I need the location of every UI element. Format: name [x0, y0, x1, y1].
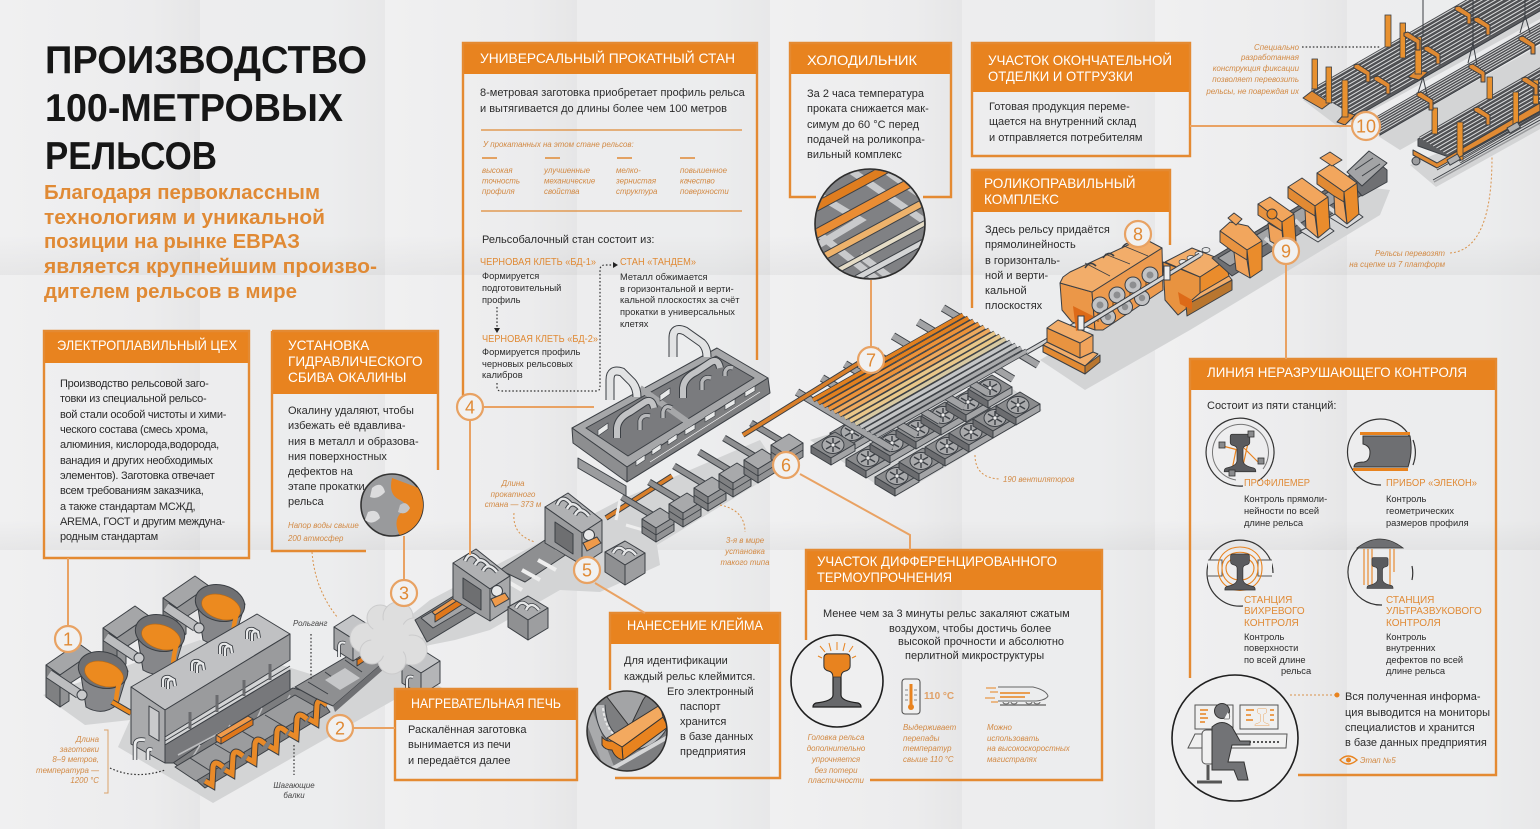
panel: differentiated hardening: УЧАСТОК ДИФФЕРЕНЦИРОВАННОГО	[817, 554, 1057, 569]
panel: hydraulic descaling: рельса	[288, 496, 325, 508]
station: eddy current: СТАНЦИЯ	[1244, 595, 1292, 606]
panel: universal rolling mill: мелко-	[616, 166, 641, 175]
caption: third in the world: такого типа	[720, 558, 770, 567]
caption: fixation design: позволяет перевозить	[1212, 75, 1299, 84]
panel: non-destructive testing line: в базе данных предприятия	[1345, 737, 1487, 749]
caption: platforms: Рельсы перевозят	[1375, 249, 1445, 258]
caption: mill length: Длина	[501, 479, 525, 488]
panel: straightening complex text: прямолинейность	[985, 239, 1076, 251]
caption: fixation design: рельсы, не повреждая их	[1205, 87, 1300, 96]
numbered markers: 8	[1133, 224, 1143, 244]
panel: universal rolling mill: подготовительный	[482, 283, 561, 293]
panel: differentiated hardening: перепады	[903, 734, 940, 743]
station: ultrasonic	[1348, 539, 1482, 676]
panel: final finishing and shipping: ОТДЕЛКИ И ОТГРУЗКИ	[988, 69, 1133, 84]
panel: universal rolling mill: 8-метровая заготовка приобретает профиль рельса	[480, 87, 745, 99]
panel: differentiated hardening: упрочняется	[811, 755, 861, 764]
station: eddy current: ВИХРЕВОГО	[1244, 606, 1305, 617]
panel: final finishing and shipping: УЧАСТОК ОКОНЧАТЕЛЬНОЙ	[988, 53, 1172, 68]
title: ПРОИЗВОДСТВО	[45, 39, 367, 82]
panel: branding	[585, 613, 780, 778]
panel: straightening complex text	[972, 170, 1170, 312]
panel: differentiated hardening: воздухом, чтобы достичь более	[889, 623, 1051, 635]
panel: universal rolling mill: точность	[482, 176, 520, 186]
panel: universal rolling mill: качество	[680, 176, 715, 186]
caption: billet length: Длина	[76, 735, 99, 744]
panel: universal rolling mill: черновых рельсовых	[482, 359, 573, 369]
panel: heating furnace text: и передаётся далее	[408, 755, 511, 767]
caption: third in the world: установка	[724, 547, 765, 556]
illustration: fans	[811, 375, 1040, 496]
panel: hydraulic descaling: СБИВА ОКАЛИНЫ	[288, 370, 406, 385]
station: profilometer: длине рельса	[1244, 518, 1304, 528]
panel: differentiated hardening: без потери	[814, 766, 858, 775]
icon: eye stage link: Этап №5	[1360, 756, 1396, 765]
illustration: inspection line	[1212, 151, 1387, 278]
icon: eye stage link	[1340, 756, 1396, 765]
caption: mill length	[485, 479, 542, 542]
panel: branding: каждый рельс клеймится.	[624, 671, 755, 683]
panel: electric melting shop: товки из специальной рельсо-	[60, 393, 207, 405]
panel: universal rolling mill: прокатки в универсальных	[620, 307, 735, 317]
panel: differentiated hardening: магистралях	[987, 755, 1038, 764]
numbered markers	[55, 112, 1380, 741]
panel: straightening complex text: РОЛИКОПРАВИЛЬНЫЙ	[984, 176, 1136, 191]
illustration: rail bundles and wagon	[1303, 0, 1540, 182]
panel: differentiated hardening: на высокоскоростных	[987, 744, 1071, 753]
illustration: heating furnace	[131, 614, 330, 788]
station: ultrasonic: внутренних	[1386, 643, 1436, 653]
panel: universal rolling mill: повышенное	[680, 166, 727, 175]
caption: platforms	[1349, 157, 1492, 269]
caption: roller table: Рольганг	[293, 619, 328, 628]
panel: universal rolling mill: Рельсобалочный стан состоит из:	[482, 234, 654, 246]
panel: universal rolling mill: кальной плоскостях за счёт	[620, 295, 740, 305]
panel: non-destructive testing line: специалистов и хранится	[1345, 722, 1475, 734]
panel: final finishing and shipping: щается на внутренний склад	[989, 116, 1137, 128]
icon: operator at monitors	[1172, 675, 1298, 801]
icon: thermometer	[902, 679, 954, 714]
illustration: cooling bed	[743, 308, 1090, 449]
panel: non-destructive testing line: Состоит из пяти станций:	[1207, 400, 1336, 412]
panel: branding: хранится	[680, 716, 726, 728]
station: Elekon device: ПРИБОР «ЭЛЕКОН»	[1386, 478, 1477, 489]
caption: walking beams: балки	[283, 791, 305, 800]
panel: electric melting shop: AREMA, ГОСТ и другим междуна-	[60, 516, 226, 528]
caption: mill length: стана — 373 м	[485, 500, 542, 509]
panel: straightening complex text: Здесь рельсу придаётся	[985, 224, 1110, 236]
panel: cooling bed text: За 2 часа температура	[807, 88, 924, 100]
panel: final finishing and shipping: и отправляется потребителям	[989, 132, 1142, 144]
caption: third in the world	[720, 505, 770, 567]
panel: differentiated hardening: температур	[903, 744, 952, 753]
numbered markers: 4	[465, 398, 475, 418]
panel: hydraulic descaling: Напор воды свыше	[288, 521, 359, 530]
panel: straightening complex text: плоскостях	[985, 300, 1043, 312]
panel: universal rolling mill: ЧЕРНОВАЯ КЛЕТЬ «БД-1»	[480, 257, 596, 268]
panel: differentiated hardening	[791, 550, 1102, 785]
subtitle: позиции на рынке ЕВРАЗ	[44, 230, 300, 253]
panel: differentiated hardening: свыше 110 °C	[903, 755, 954, 764]
station: ultrasonic: СТАНЦИЯ	[1386, 595, 1434, 606]
caption: fixation design: разработанная	[1240, 53, 1300, 62]
panel: universal rolling mill: клетях	[620, 319, 649, 329]
subtitle: технологиям и уникальной	[44, 206, 325, 229]
icon: hardened rail head	[791, 635, 883, 727]
illustration: hydraulic rams	[578, 423, 803, 542]
caption: billet length: 1200 °C	[70, 776, 99, 785]
panel: universal rolling mill: поверхности	[680, 187, 729, 196]
panel: branding: Для идентификации	[624, 655, 728, 667]
panel: electric melting shop: родным стандартам	[60, 531, 158, 543]
panel: hydraulic descaling	[272, 331, 438, 551]
panel: hydraulic descaling: УСТАНОВКА	[288, 338, 369, 353]
station: profilometer: ПРОФИЛЕМЕР	[1244, 478, 1310, 489]
station: profilometer	[1206, 418, 1327, 528]
numbered markers: 2	[335, 718, 345, 738]
caption: platforms: на сцепке из 7 платформ	[1349, 260, 1446, 269]
panel: differentiated hardening: Выдерживает	[903, 723, 956, 732]
panel: cooling bed text: проката снижается мак-	[807, 103, 929, 115]
subtitle: является крупнейшим произво-	[43, 255, 377, 278]
station: ultrasonic: КОНТРОЛЯ	[1386, 618, 1441, 629]
icon: thermometer: 110 °C	[924, 691, 954, 702]
panel: electric melting shop: элементов). Заготовка отвечает	[60, 470, 215, 482]
panel: hydraulic descaling: ния поверхностных	[288, 451, 387, 463]
panel: universal rolling mill: профиля	[482, 187, 516, 196]
panel: universal rolling mill: структура	[616, 187, 658, 196]
panel: universal rolling mill: свойства	[544, 187, 580, 196]
panel: non-destructive testing line	[1172, 359, 1496, 801]
caption: water pressure leader	[312, 552, 338, 618]
panel: straightening complex text: ной и верти-	[985, 270, 1048, 282]
caption: billet length: температура —	[36, 766, 99, 775]
panel: straightening complex text: в горизонталь-	[985, 255, 1060, 267]
panel: branding: Его электронный	[667, 686, 754, 698]
illustration: walking beams	[205, 701, 327, 785]
panel: non-destructive testing line: ция выводится на мониторы	[1345, 707, 1490, 719]
panel: universal rolling mill: механические	[544, 176, 596, 186]
title	[45, 39, 367, 178]
caption: roller table	[293, 619, 328, 680]
panel: final finishing and shipping	[972, 43, 1190, 156]
panel: hydraulic descaling: ния в металл и образова-	[288, 436, 419, 448]
station: Elekon device: Контроль	[1386, 494, 1426, 504]
panel: branding: НАНЕСЕНИЕ КЛЕЙМА	[627, 618, 764, 633]
panel: differentiated hardening: Головка рельса	[808, 733, 864, 742]
panel: universal rolling mill: высокая	[482, 166, 513, 175]
numbered markers: 10	[1356, 116, 1376, 136]
panel: cooling bed text	[790, 43, 955, 290]
station: eddy current: рельса	[1281, 666, 1312, 676]
station: profilometer: нейности по всей	[1244, 506, 1319, 516]
illustration: cube units	[334, 615, 440, 695]
station: eddy current: Контроль	[1244, 632, 1284, 642]
panel: straightening complex text: кальной	[985, 285, 1027, 297]
panel: non-destructive testing line: Вся полученная информа-	[1345, 691, 1481, 703]
illustration: descaling and mill stands	[415, 476, 672, 642]
panel: branding: предприятия	[680, 746, 746, 758]
panel: differentiated hardening: пластичности	[808, 776, 865, 785]
panel: cooling bed text: ХОЛОДИЛЬНИК	[807, 53, 917, 68]
caption: fixation design	[1205, 43, 1380, 96]
panel: electric melting shop	[44, 331, 249, 558]
panel: electric melting shop: вой стали особой чистоты и хими-	[60, 409, 227, 421]
illustration: universal mill frame	[572, 330, 770, 482]
numbered markers: 5	[582, 560, 592, 580]
panel: differentiated hardening: перлитной микроструктуры	[905, 650, 1044, 662]
subtitle	[43, 181, 377, 303]
illustration: straightening complex	[1043, 233, 1232, 374]
illustration: ladles	[46, 576, 249, 713]
panel: differentiated hardening: использовать	[987, 734, 1040, 743]
station: ultrasonic: длине рельса	[1386, 666, 1446, 676]
panel: hydraulic descaling: этапе прокатки	[288, 481, 365, 493]
station: eddy current: поверхности	[1244, 643, 1298, 653]
panel: differentiated hardening: дополнительно	[807, 744, 866, 753]
panel: cooling bed text: вильный комплекс	[807, 149, 902, 161]
panel: non-destructive testing line: ЛИНИЯ НЕРАЗРУШАЮЩЕГО КОНТРОЛЯ	[1207, 365, 1467, 380]
title: 100-МЕТРОВЫХ	[45, 87, 343, 130]
panel: universal rolling mill: СТАН «ТАНДЕМ»	[620, 257, 696, 268]
caption: billet length: заготовки	[59, 745, 100, 754]
caption: billet length: 8–9 метров,	[52, 755, 99, 764]
numbered markers: 9	[1281, 242, 1291, 262]
numbered markers: 6	[781, 456, 791, 476]
title: РЕЛЬСОВ	[45, 135, 217, 178]
panel: heating furnace text	[395, 689, 577, 780]
panel: electric melting shop: Производство рельсовой заго-	[60, 378, 208, 390]
panel: hydraulic descaling: избежать её вдавлива-	[288, 420, 406, 432]
panel: electric melting shop: ЭЛЕКТРОПЛАВИЛЬНЫЙ ЦЕХ	[57, 338, 237, 353]
panel: electric melting shop: всем требованиям заказчика,	[60, 485, 204, 497]
numbered markers: 7	[866, 350, 876, 370]
connector lines	[68, 126, 1352, 728]
station: ultrasonic: УЛЬТРАЗВУКОВОГО	[1386, 606, 1482, 617]
panel: straightening complex text: КОМПЛЕКС	[984, 192, 1059, 207]
station: eddy current: по всей длине	[1244, 655, 1306, 665]
caption: walking beams	[273, 745, 315, 800]
station: eddy current	[1207, 540, 1312, 676]
panel: hydraulic descaling: Окалину удаляют, чтобы	[288, 405, 414, 417]
station: profilometer: Контроль прямоли-	[1244, 494, 1327, 504]
panel: universal rolling mill: профиль	[482, 295, 521, 305]
illustration: roller table	[295, 633, 392, 712]
panel: electric melting shop: ческого состава (смесь хрома,	[60, 424, 208, 436]
panel: universal rolling mill: и вытягивается до длины более чем 100 метров	[480, 103, 727, 115]
panel: universal rolling mill: Металл обжимается	[620, 272, 708, 282]
caption: fans	[975, 455, 1074, 484]
caption: walking beams: Шагающие	[273, 781, 315, 790]
panel: universal rolling mill: улучшенные	[544, 166, 590, 175]
panel: electric melting shop: алюминия, кислорода,водорода,	[60, 439, 219, 451]
panel: differentiated hardening: высокой прочности и абсолютно	[898, 636, 1064, 648]
station: eddy current: КОНТРОЛЯ	[1244, 618, 1299, 629]
station: ultrasonic: Контроль	[1386, 632, 1426, 642]
panel: electric melting shop: а также стандартам МСЖД,	[60, 501, 195, 513]
panel: branding: паспорт	[680, 701, 721, 713]
panel: electric melting shop: ванадия и других необходимых	[60, 455, 213, 467]
numbered markers: 3	[399, 584, 409, 604]
panel: cooling bed text: симум до 60 °C перед	[807, 119, 920, 131]
panel: differentiated hardening: ТЕРМОУПРОЧНЕНИЯ	[817, 570, 952, 585]
caption: billet length	[36, 730, 165, 793]
caption: mill length: прокатного	[491, 490, 536, 499]
illustration: steam cloud	[350, 602, 427, 674]
subtitle: дителем рельсов в мире	[44, 280, 297, 303]
panel: heating furnace text: НАГРЕВАТЕЛЬНАЯ ПЕЧЬ	[411, 696, 561, 711]
station: Elekon device: геометрических	[1386, 506, 1454, 516]
caption: fixation design: конструкция фиксации	[1213, 64, 1300, 73]
panel: hydraulic descaling: ГИДРАВЛИЧЕСКОГО	[288, 354, 423, 369]
panel: differentiated hardening: Можно	[987, 723, 1012, 732]
panel: universal rolling mill	[463, 43, 757, 400]
numbered markers: 1	[63, 630, 73, 650]
panel: universal rolling mill: Формируется	[482, 271, 539, 281]
panel: differentiated hardening: Менее чем за 3 минуты рельс закаляют сжатым	[823, 608, 1070, 620]
panel: final finishing and shipping: Готовая продукция переме-	[989, 101, 1130, 113]
panel: universal rolling mill: зернистая	[615, 176, 657, 186]
panel: universal rolling mill: в горизонтальной и верти-	[620, 284, 734, 294]
caption: third in the world: 3-я в мире	[726, 536, 764, 545]
panel: cooling bed text: подачей на роликопра-	[807, 134, 925, 146]
caption: fixation design: Специально	[1254, 43, 1299, 52]
station: ultrasonic: дефектов по всей	[1386, 655, 1463, 665]
subtitle: Благодаря первоклассным	[44, 181, 320, 204]
panel: universal rolling mill: калибров	[482, 370, 523, 380]
panel: universal rolling mill: УНИВЕРСАЛЬНЫЙ ПРОКАТНЫЙ СТАН	[480, 51, 735, 66]
panel: hydraulic descaling: дефектов на	[288, 466, 354, 478]
panel: universal rolling mill: ЧЕРНОВАЯ КЛЕТЬ «БД-2»	[482, 334, 598, 345]
station: Elekon device	[1347, 419, 1477, 528]
icon: high-speed train	[985, 687, 1048, 705]
panel: heating furnace text: Раскалённая заготовка	[408, 724, 526, 736]
panel: heating furnace text: вынимается из печи	[408, 739, 511, 751]
panel: hydraulic descaling: 200 атмосфер	[287, 534, 344, 543]
panel: universal rolling mill: Формируется профиль	[482, 347, 580, 357]
caption: fans: 190 вентиляторов	[1003, 475, 1074, 484]
panel: branding: в базе данных	[680, 731, 754, 743]
panel: universal rolling mill: У прокатанных на этом стане рельсов:	[482, 140, 634, 149]
station: Elekon device: размеров профиля	[1386, 518, 1469, 528]
